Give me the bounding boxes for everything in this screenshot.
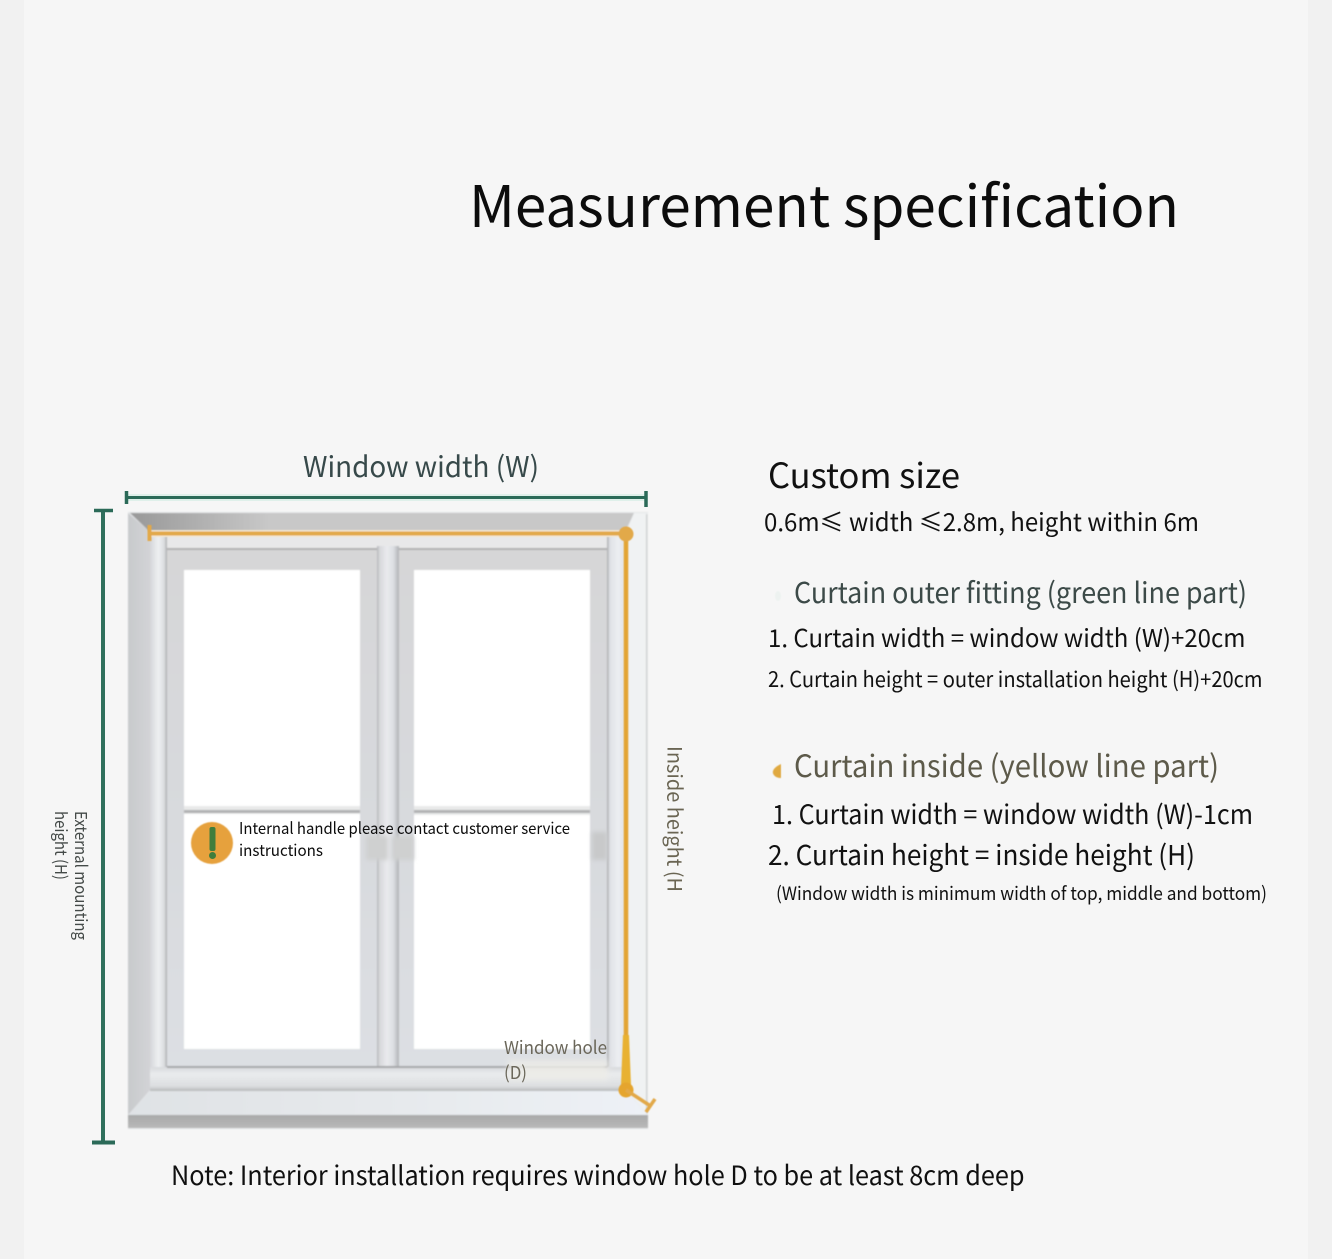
window hole label: [504, 1034, 607, 1085]
yellow inside measurement lines: [148, 525, 655, 1112]
window illustration: [128, 512, 648, 1129]
top light band: [150, 532, 626, 549]
internal handle note: instructions: [239, 837, 323, 861]
left transom: [184, 806, 360, 814]
right edge line: [646, 514, 648, 1116]
window hole label: Window hole: [504, 1034, 607, 1060]
green width line: [126, 491, 646, 507]
sash bottom line: [167, 1066, 607, 1068]
installation note: Note: Interior installation requires window hole D to be at least 8cm deep: [171, 1154, 1024, 1193]
outer fitting heading: Curtain outer fitting (green line part): [794, 571, 1247, 612]
external mounting height label: [50, 811, 94, 941]
custom size heading: Custom size: [768, 448, 960, 498]
green height line: [92, 510, 115, 1142]
inside height label: Inside height (H: [662, 746, 690, 892]
right transom: [414, 806, 590, 815]
internal handle note: Internal handle please contact customer service: [239, 815, 570, 839]
icon: warning: [191, 822, 233, 864]
window width footnote: (Window width is minimum width of top, middle and bottom): [776, 880, 1267, 906]
outer fitting formula 2: 2. Curtain height = outer installation height (H)+20cm: [768, 663, 1262, 694]
right inner jamb: [607, 532, 626, 1090]
window width label: Window width (W): [303, 445, 539, 486]
left glass lower: [184, 814, 360, 1049]
icon: pale green bullet: [775, 591, 781, 601]
window sill top: [128, 1091, 648, 1115]
window hole label: (D): [504, 1059, 527, 1085]
right glass lower: [414, 815, 590, 1049]
left sash: [167, 549, 377, 1068]
right sash: [399, 549, 607, 1068]
inside formula 2: 2. Curtain height = inside height (H): [768, 833, 1195, 873]
top recess shadow: [130, 513, 634, 532]
left inner jamb: [150, 532, 167, 1090]
external mounting height label: External mounting: [70, 811, 94, 941]
outer fitting formula 1: 1. Curtain width = window width (W)+20cm: [768, 620, 1246, 655]
left glass upper: [184, 570, 360, 806]
bottom ledge: [150, 1067, 626, 1091]
right glass upper: [414, 570, 590, 806]
size range: 0.6m≤ width ≤2.8m, height within 6m: [764, 504, 1199, 539]
icon: yellow bullet: [773, 764, 781, 778]
title: Measurement specification: [469, 160, 1179, 244]
handle smudges: [366, 832, 607, 860]
external mounting height label: height (H): [50, 811, 74, 880]
window outer frame: [128, 512, 648, 1129]
sash top shadows: [167, 548, 607, 550]
left reveal: [128, 513, 150, 1115]
inside heading: Curtain inside (yellow line part): [794, 742, 1219, 786]
window hole label patch: [508, 1060, 608, 1080]
right outer strip: [626, 513, 648, 1115]
center mullion: [377, 546, 399, 1070]
window sill front: [128, 1115, 648, 1128]
internal handle note: [239, 815, 570, 861]
inside formula 1: 1. Curtain width = window width (W)-1cm: [772, 793, 1253, 832]
